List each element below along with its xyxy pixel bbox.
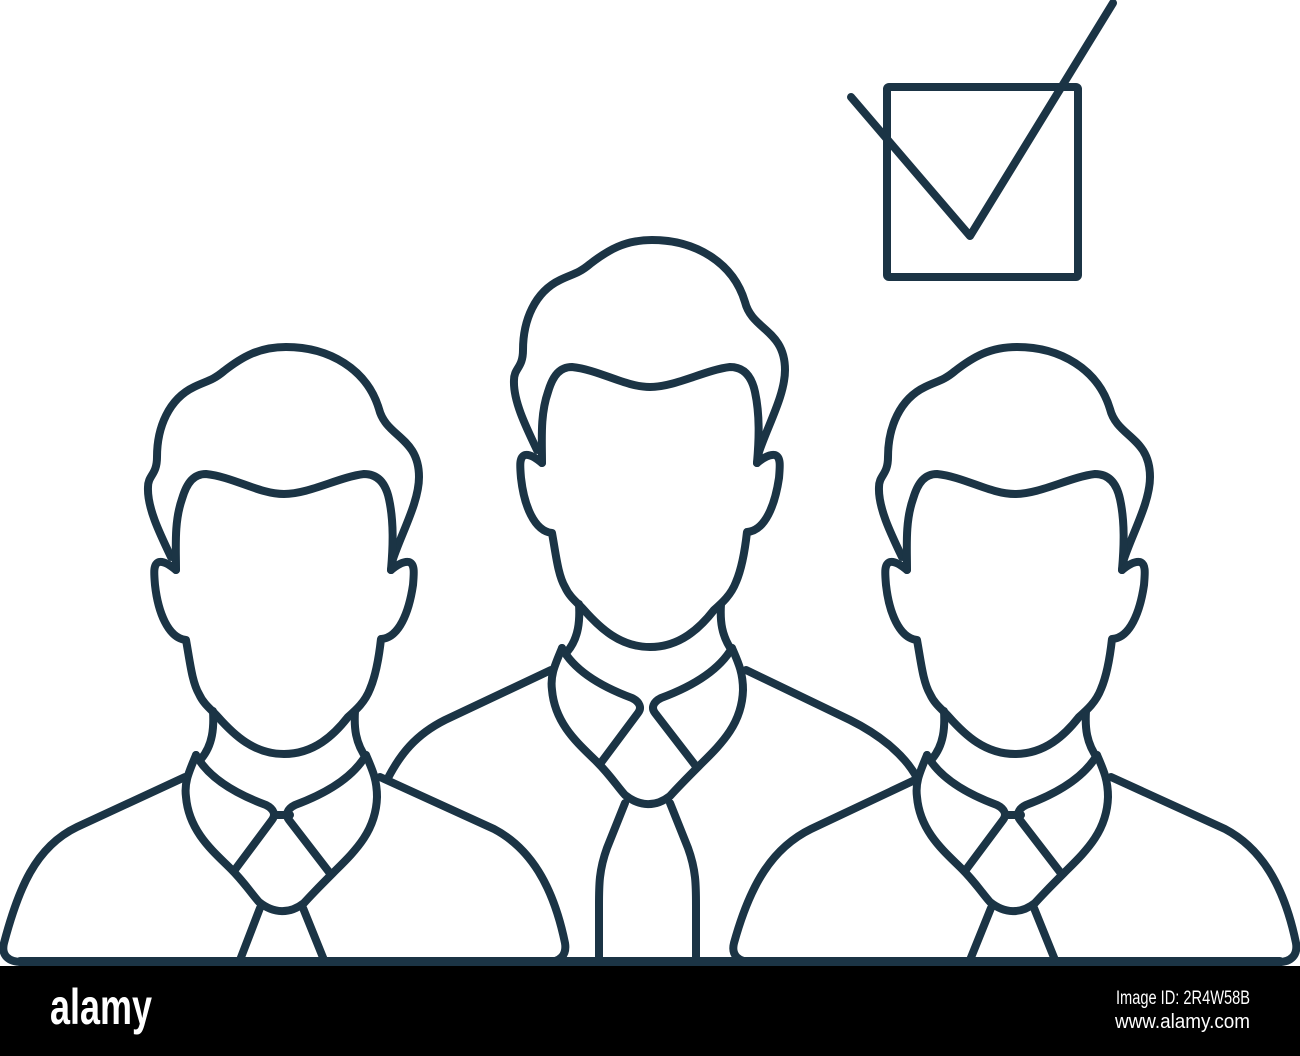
logo: alamy: alamy [50,979,152,1035]
right person [733,347,1296,962]
footer bar [0,966,1300,1056]
left person [3,347,565,962]
image id: Image ID: 2R4W58B [1116,988,1250,1009]
baseline [20,957,1280,966]
center person [388,240,917,960]
icon: checkbox with check mark [851,3,1113,277]
website: www.alamy.com [1114,1011,1250,1033]
